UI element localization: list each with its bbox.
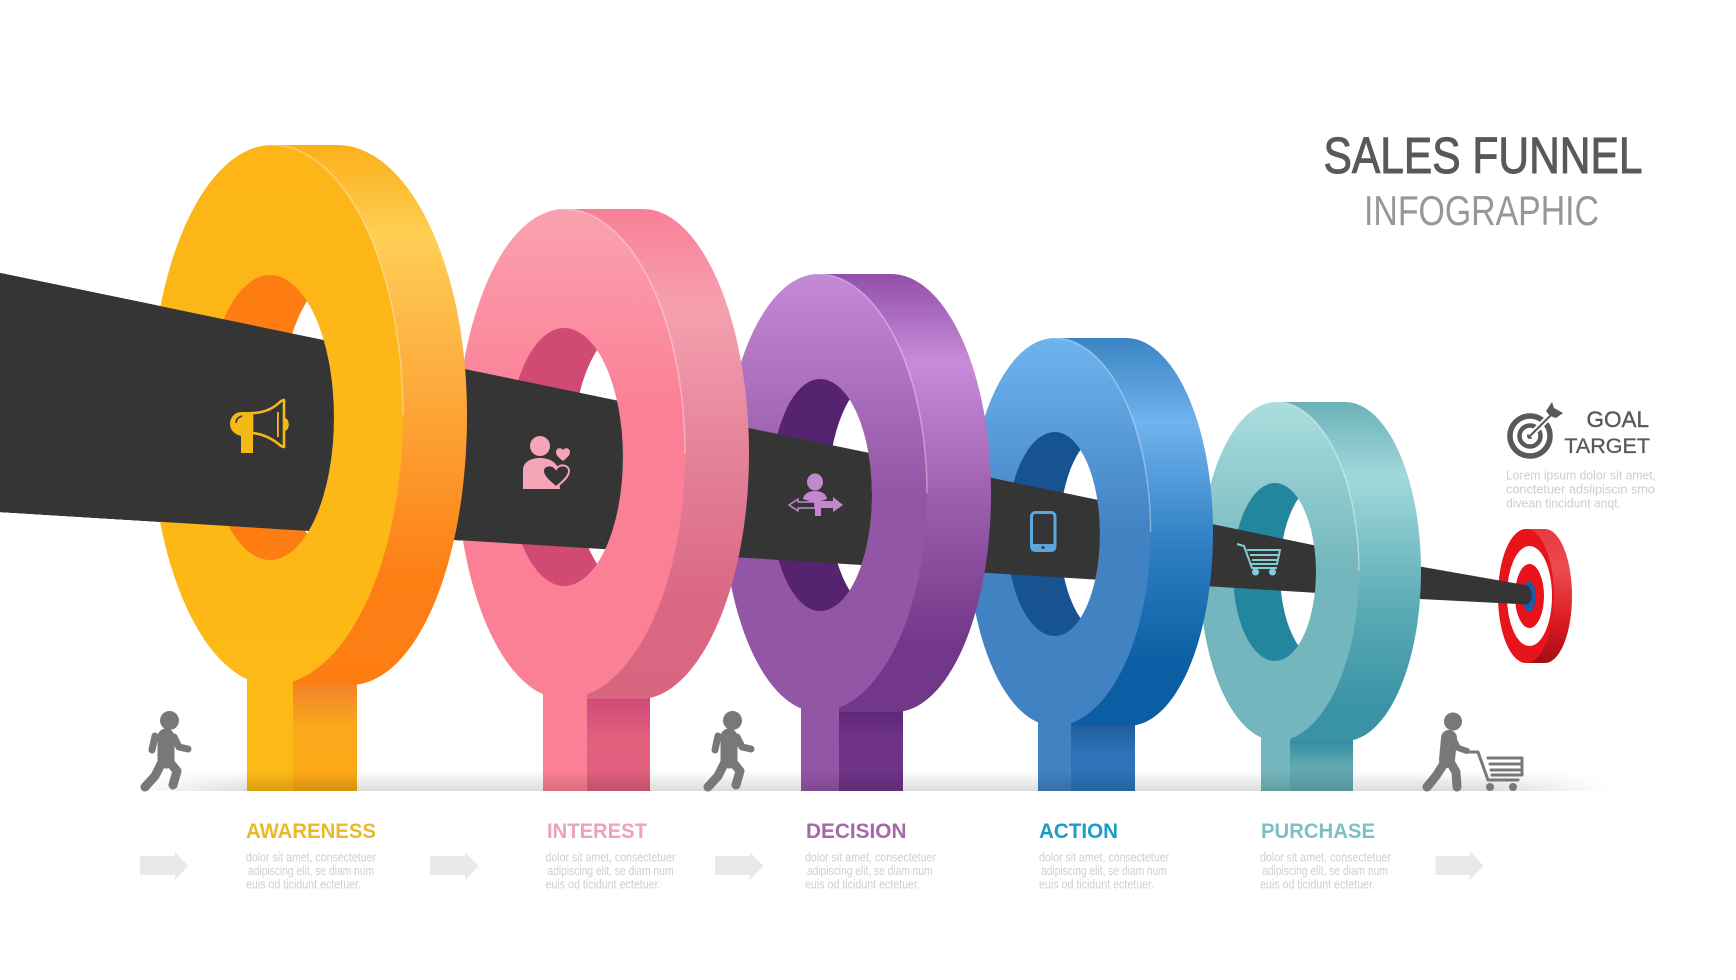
step: interest: adipiscing elit, se diam num — [548, 864, 674, 878]
step: decision: dolor sit amet, consectetuer — [805, 850, 936, 864]
goal target heading: GOAL — [1586, 407, 1649, 432]
step: awareness: euis od ticidunt ectetuer. — [246, 878, 361, 892]
step: awareness: AWARENESS — [246, 819, 376, 843]
arrow 2 — [430, 852, 478, 880]
icon: shopping cart — [1237, 544, 1280, 576]
step: action: adipiscing elit, se diam num — [1041, 864, 1167, 878]
title — [1324, 127, 1642, 234]
figure: walking person 1 — [145, 711, 188, 787]
goal description: conctetuer adslipiscin smo — [1506, 482, 1655, 496]
step: decision: DECISION — [806, 819, 906, 843]
arrow 1 — [140, 852, 188, 880]
funnel band through ring 2 — [0, 273, 623, 550]
funnel band through ring 5 — [0, 273, 1400, 598]
arrow 3 — [715, 852, 764, 880]
arrow 4 — [1436, 851, 1484, 880]
step: decision: adipiscing elit, se diam num — [807, 864, 932, 878]
step: decision — [805, 819, 936, 892]
step: interest — [546, 819, 676, 892]
ring 5: purchase — [1200, 402, 1421, 791]
step: interest: dolor sit amet, consectetuer — [546, 850, 676, 864]
step: action: euis od ticidunt ectetuer. — [1039, 878, 1154, 892]
funnel band through ring 1 — [0, 273, 334, 531]
figure: walking person 2 — [708, 711, 751, 787]
icon: person with hearts — [523, 436, 570, 489]
goal description: divean tincidunt anqt. — [1506, 496, 1621, 510]
figure: person pushing cart — [1427, 712, 1522, 791]
step: awareness: adipiscing elit, se diam num — [248, 864, 374, 878]
funnel band through ring 4 — [0, 273, 1100, 580]
arrow tip band to target — [1300, 541, 1532, 604]
step: action: dolor sit amet, consectetuer — [1039, 850, 1169, 864]
icon: goal dartboard — [1510, 402, 1563, 456]
funnel band through ring 3 — [0, 273, 872, 565]
title: INFOGRAPHIC — [1364, 187, 1599, 234]
step: purchase: euis od ticidunt ectetuer. — [1260, 878, 1375, 892]
step: interest: INTEREST — [547, 819, 647, 843]
step: purchase — [1260, 819, 1391, 892]
step: action: ACTION — [1039, 819, 1118, 843]
bullseye target — [1498, 529, 1572, 663]
step: action — [1039, 819, 1169, 892]
goal target heading: TARGET — [1564, 434, 1650, 458]
step: purchase: PURCHASE — [1261, 819, 1375, 843]
goal description: Lorem ipsum dolor sit amet, — [1506, 468, 1656, 482]
icon: megaphone — [230, 400, 289, 453]
ring 1: awareness — [150, 145, 467, 791]
step: interest: euis od ticidunt ectetuer. — [546, 878, 660, 892]
ring 2: interest — [456, 209, 749, 791]
step: purchase: adipiscing elit, se diam num — [1262, 864, 1388, 878]
goal target heading — [1564, 407, 1650, 458]
icon: decision person with arrows — [789, 474, 843, 516]
goal description — [1506, 468, 1656, 510]
title: SALES FUNNEL — [1324, 127, 1642, 184]
step: awareness: dolor sit amet, consectetuer — [246, 850, 376, 864]
ground shadow — [158, 776, 1582, 791]
step: purchase: dolor sit amet, consectetuer — [1260, 850, 1391, 864]
step: awareness — [246, 819, 376, 892]
ring 4: action — [968, 338, 1213, 791]
step: decision: euis od ticidunt ectetuer. — [805, 878, 920, 892]
icon: smartphone — [1032, 512, 1055, 551]
ring 3: decision — [722, 274, 991, 791]
